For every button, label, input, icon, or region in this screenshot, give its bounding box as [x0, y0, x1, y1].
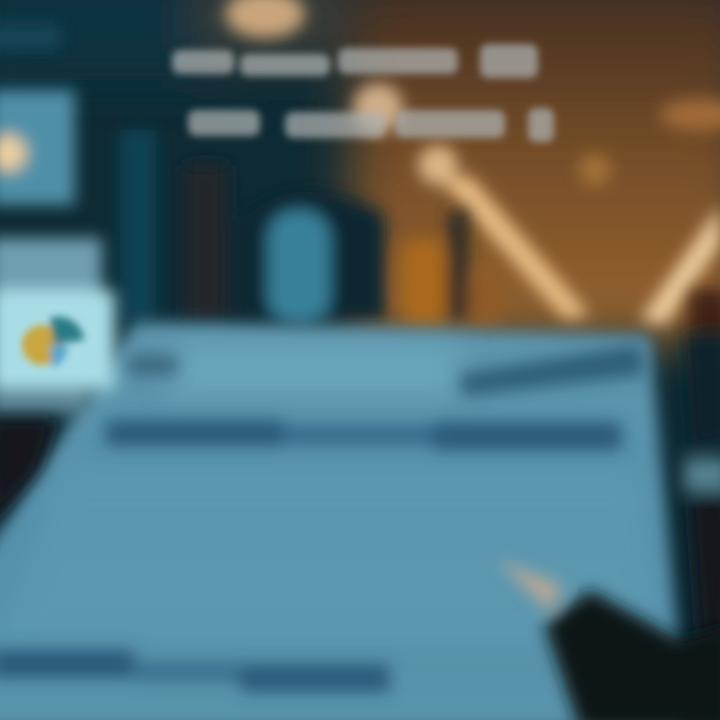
background: warm ceiling: [0, 0, 720, 340]
pen: [498, 560, 720, 720]
ceiling light streaks: [225, 0, 720, 325]
paper: main document sheet: [0, 322, 685, 720]
title: blurred heading lines: [172, 44, 554, 142]
left dark object: [0, 420, 55, 525]
document text lines: [0, 344, 645, 692]
left card: chart card: [0, 238, 115, 414]
background: archway and columns: [120, 130, 720, 340]
icon: pie chart: [22, 317, 84, 368]
right dark edge: [684, 330, 720, 640]
left panel: blue window: [0, 25, 75, 205]
paper lighter band: [0, 345, 660, 640]
